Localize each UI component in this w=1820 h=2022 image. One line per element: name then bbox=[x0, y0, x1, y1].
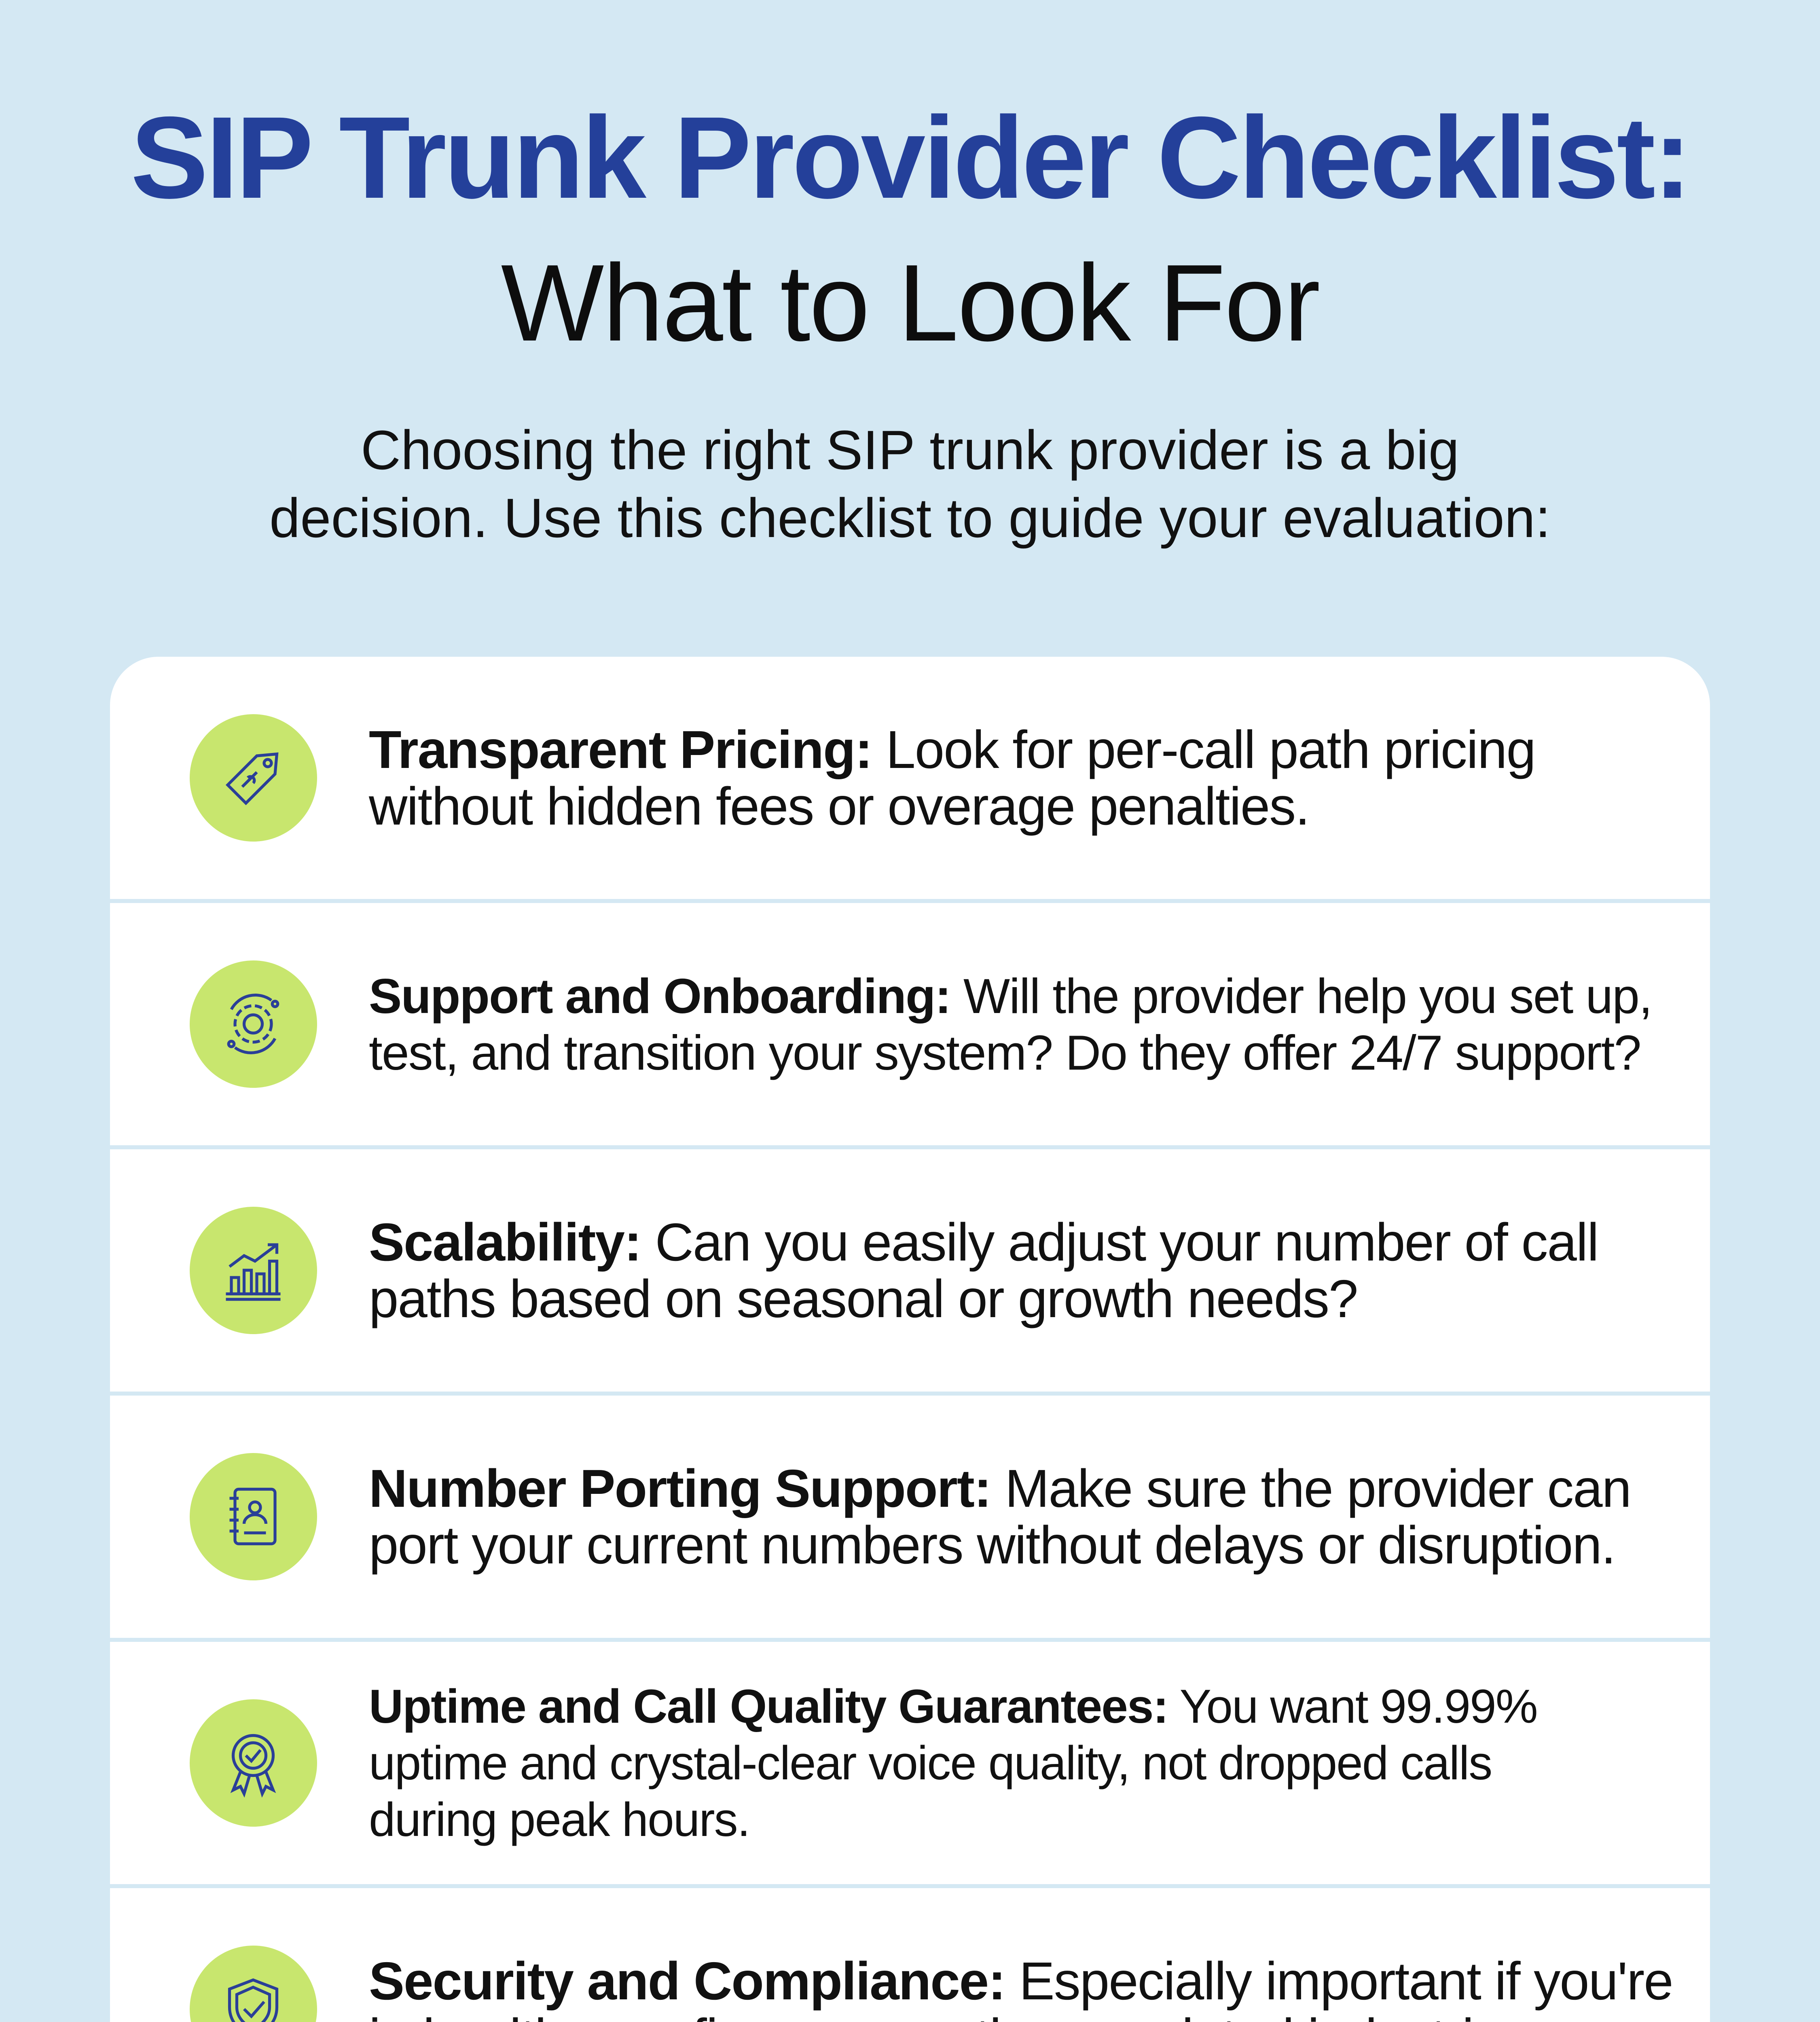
icon: shield bbox=[190, 1946, 317, 2022]
icon: price tag bbox=[190, 714, 317, 842]
item: scalability: paths based on seasonal or growth needs? bbox=[369, 1269, 1357, 1328]
item: support and onboarding: Support and Onboarding: Will the provider help you set up, bbox=[369, 968, 1652, 1023]
intro text bbox=[0, 417, 1820, 552]
title: SIP Trunk Provider Checklist: bbox=[131, 93, 1689, 223]
item: number porting: port your current numbers without delays or disruption. bbox=[369, 1515, 1615, 1575]
item: support and onboarding bbox=[110, 903, 1710, 1149]
item: uptime and quality: uptime and crystal-clear voice quality, not dropped calls bbox=[369, 1736, 1492, 1790]
intro text: Choosing the right SIP trunk provider is a big bbox=[361, 419, 1459, 481]
item: transparent pricing: without hidden fees or overage penalties. bbox=[369, 776, 1309, 835]
item: uptime and quality: during peak hours. bbox=[369, 1793, 749, 1846]
intro text: decision. Use this checklist to guide your evaluation: bbox=[269, 487, 1551, 549]
item: security: Security and Compliance: Especially important if you're bbox=[369, 1951, 1673, 2011]
item: uptime and quality: Uptime and Call Quality Guarantees: You want 99.99% bbox=[369, 1680, 1537, 1733]
subtitle: What to Look For bbox=[501, 242, 1319, 364]
icon: award badge bbox=[190, 1699, 317, 1827]
panel: checklist card bbox=[110, 657, 1710, 2022]
item: number porting bbox=[110, 1396, 1710, 1642]
icon: contact book bbox=[190, 1453, 317, 1580]
item: number porting: Number Porting Support: Make sure the provider can bbox=[369, 1458, 1631, 1518]
item: transparent pricing: Transparent Pricing: Look for per-call path pricing bbox=[369, 720, 1535, 779]
item: support and onboarding: test, and transition your system? Do they offer 24/7 support? bbox=[369, 1025, 1640, 1080]
item: uptime and quality bbox=[110, 1642, 1710, 1888]
item: transparent pricing bbox=[110, 657, 1710, 903]
item: security bbox=[110, 1888, 1710, 2022]
item: scalability: Scalability: Can you easily adjust your number of call bbox=[369, 1212, 1598, 1271]
icon: growth chart bbox=[190, 1207, 317, 1334]
icon: gear bbox=[190, 960, 317, 1088]
item: scalability bbox=[110, 1149, 1710, 1396]
